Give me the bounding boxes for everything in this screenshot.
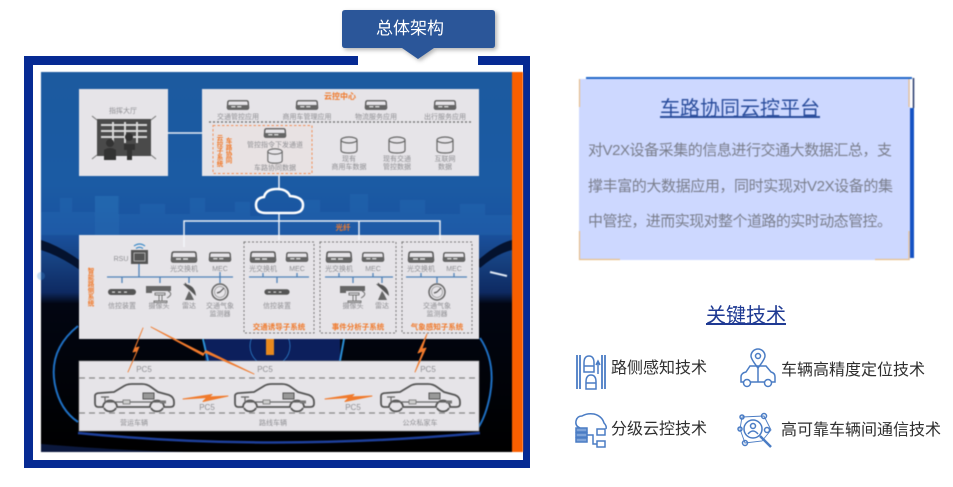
subsystem: traffic guidance (244, 242, 314, 333)
subsystem: vehicle-road cloud control: 控 (217, 140, 224, 148)
subsystem: vehicle-road cloud control: 子 (217, 147, 224, 155)
body text: 撑丰富的大数据应用，同时实现对V2X设备的集 (588, 177, 893, 195)
main devices: 监测器 (210, 309, 230, 318)
car: commercial vehicle (95, 384, 174, 427)
subsystem: vehicle-road cloud control: 同 (226, 156, 233, 164)
icon: cloud servers (576, 414, 606, 447)
vertical label: intelligent roadside system: 能 (88, 272, 95, 282)
application servers: 交通管控应用 (217, 112, 259, 121)
panel: vehicles (79, 361, 479, 431)
body text: 中管控，进而实现对整个道路的实时动态管控。 (588, 213, 892, 230)
callout: title (342, 10, 495, 59)
data stores: 管控数据 (383, 162, 411, 171)
data stores: 现有交通 (383, 154, 411, 163)
icon: roadside sensing (577, 355, 605, 389)
lightning links (128, 327, 427, 402)
body text (588, 141, 893, 230)
subsystem: event analysis: 雷达 (375, 301, 389, 310)
subsystem: weather sensing: 气象感知子系统 (411, 322, 464, 332)
vertical label: intelligent roadside system: 智 (88, 266, 94, 275)
PC5 labels: PC5 (420, 365, 436, 374)
data stores: 商用车数据 (332, 162, 366, 171)
key technology: roadside sensing (577, 355, 707, 389)
subsystem: vehicle-road cloud control: 云 (217, 134, 224, 142)
subsystem: event analysis (320, 242, 396, 333)
data stores: 数据 (438, 162, 452, 171)
key technology: hierarchical cloud control (576, 414, 707, 447)
icon: RSU: RSU (114, 256, 128, 263)
main devices: 光交换机 (170, 264, 198, 273)
vertical label: intelligent roadside system: 系 (88, 292, 95, 301)
subsystem: weather sensing: 光交换机 (407, 264, 435, 273)
subsystem: traffic guidance: MEC (289, 266, 305, 273)
subsystem: weather sensing: 监测器 (426, 309, 448, 318)
vertical label: intelligent roadside system: 侧 (88, 286, 95, 294)
application servers (217, 101, 466, 121)
key technology: high-precision positioning (741, 349, 925, 386)
key technology: reliable V2V communication: 高可靠车辆间通信技术 (781, 421, 941, 439)
data stores: 现有 (342, 154, 356, 163)
data stores (332, 137, 456, 171)
subsystem: event analysis: 摄像头 (342, 301, 364, 310)
main devices: MEC (212, 266, 228, 273)
key technology: hierarchical cloud control: 分级云控技术 (611, 420, 707, 438)
outer frame (24, 54, 530, 468)
icon: RSU (114, 244, 148, 264)
key technology: high-precision positioning: 车辆高精度定位技术 (781, 361, 925, 379)
heading: platform title: 车路协同云控平台 (660, 97, 820, 120)
subsystem: traffic guidance: 光交换机 (249, 264, 277, 273)
main devices: 交通气象 (206, 301, 234, 310)
panel: roadside system (79, 235, 479, 339)
subsystem: vehicle-road cloud control: 系 (217, 152, 224, 162)
subsystem: event analysis: 事件分析子系统 (332, 322, 385, 332)
vertical label: intelligent roadside system: 路 (88, 279, 95, 288)
data stores: 互联网 (434, 154, 456, 163)
subsystem: traffic guidance: 信控装置 (263, 301, 291, 310)
car: route vehicle: 路线车辆 (259, 418, 287, 427)
panel: platform description (579, 78, 914, 260)
subsystem: weather sensing (402, 242, 472, 333)
heading: cloud control center: 云控中心 (324, 91, 356, 101)
callout: title: 总体架构 (376, 19, 444, 38)
subsystem: vehicle-road cloud control: 统 (217, 159, 224, 168)
subsystem: vehicle-road cloud control: 管控指令下发通道 (247, 140, 303, 149)
main devices: 摄像头 (148, 301, 170, 310)
label: command hall: 指挥大厅 (109, 106, 137, 115)
subsystem: event analysis: MEC (365, 266, 381, 273)
heading: key technologies: 关键技术 (706, 304, 786, 327)
key technology: roadside sensing: 路侧感知技术 (611, 359, 707, 377)
panel: command hall (79, 89, 168, 176)
subsystem: weather sensing: MEC (446, 266, 462, 273)
architecture diagram (37, 72, 523, 452)
PC5 labels: PC5 (199, 403, 215, 412)
application servers: 物流服务应用 (355, 112, 397, 121)
subsystem: event analysis: 光交换机 (325, 264, 353, 273)
main devices (107, 252, 234, 318)
subsystem: vehicle-road cloud control: 车 (226, 136, 233, 145)
subsystem: vehicle-road cloud control (213, 126, 312, 174)
main devices: 信控装置 (108, 301, 136, 310)
subsystem: vehicle-road cloud control: 车路协同数据 (254, 163, 296, 172)
label: optical fiber: 光纤 (336, 222, 351, 232)
main devices: 雷达 (182, 301, 196, 310)
car: private vehicle (381, 384, 460, 427)
car: commercial vehicle: 营运车辆 (120, 418, 148, 427)
application servers: 商用车管理应用 (282, 112, 332, 121)
subsystem: vehicle-road cloud control: 协 (226, 149, 233, 158)
icon: positioning car (741, 349, 775, 386)
subsystem: vehicle-road cloud control: 路 (226, 142, 233, 152)
icon: command hall screen (92, 116, 156, 160)
key technology: reliable V2V communication (738, 414, 941, 447)
PC5 labels (136, 365, 436, 412)
body text: 对V2X设备采集的信息进行交通大数据汇总，支 (588, 141, 892, 159)
car: route vehicle (235, 384, 314, 427)
icon: network magnifier (738, 414, 771, 447)
connector lines (168, 133, 440, 247)
orange side bar (512, 72, 523, 452)
PC5 labels: PC5 (345, 403, 361, 412)
panel: cloud control center (202, 89, 479, 176)
subsystem: weather sensing: 交通气象 (423, 301, 451, 310)
vertical label: intelligent roadside system: 统 (88, 298, 95, 308)
subsystem: traffic guidance: 交通诱导子系统 (253, 322, 306, 332)
car: private vehicle: 公众私家车 (402, 418, 438, 427)
diagram background (37, 72, 512, 452)
application servers: 出行服务应用 (424, 112, 466, 121)
PC5 labels: PC5 (136, 365, 152, 374)
icon: cloud (256, 189, 303, 213)
PC5 labels: PC5 (257, 365, 273, 374)
